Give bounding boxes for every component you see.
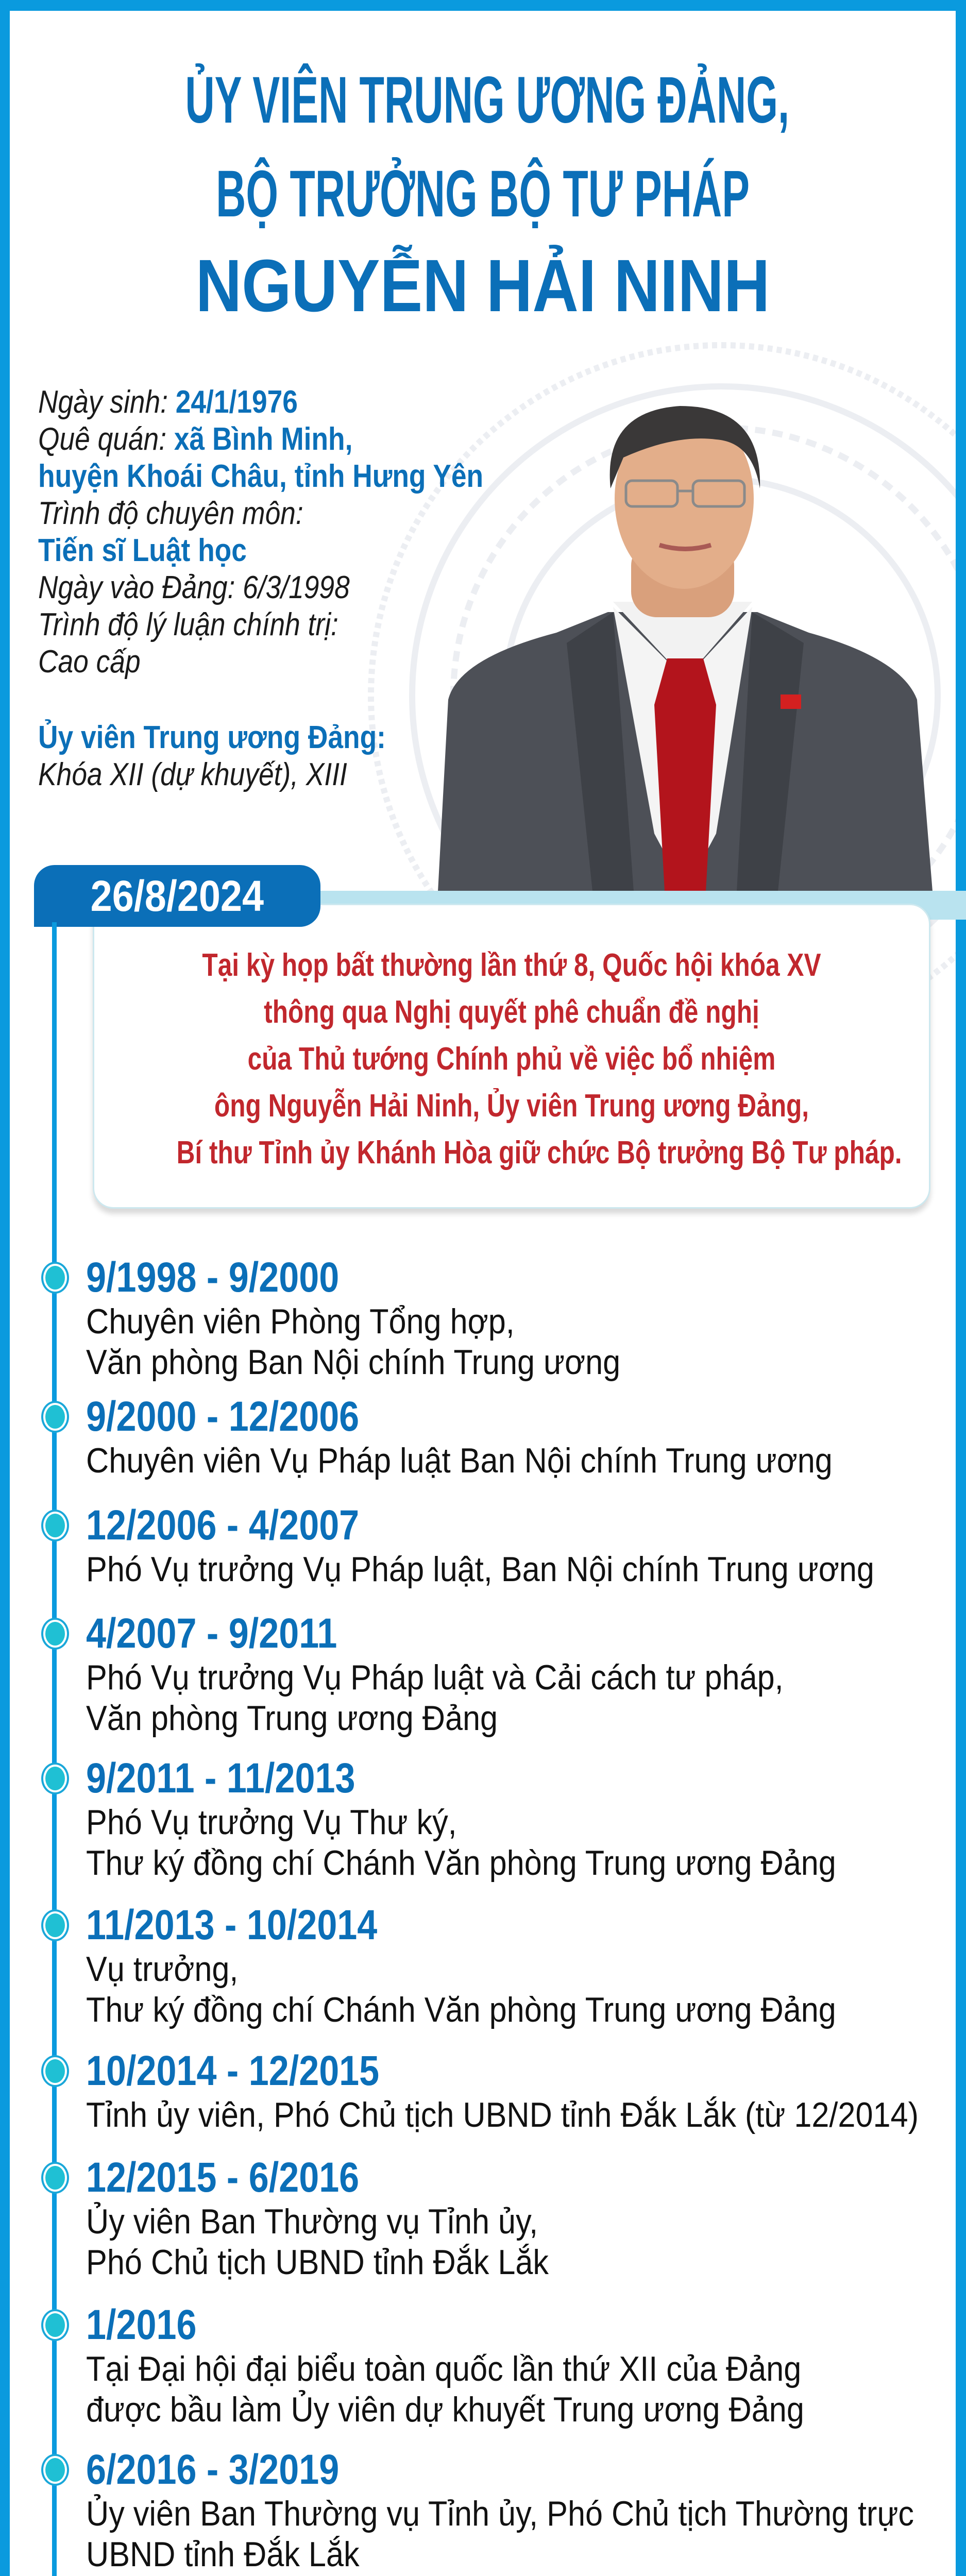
info block: Ủy viên Trung ương Đảng: [38,720,386,755]
text: Phó Vụ trưởng Vụ Pháp luật và Cải cách tư pháp, [86,1658,784,1697]
text: Tại Đại hội đại biểu toàn quốc lần thứ XII của Đảng [86,2349,801,2388]
text: Tỉnh ủy viên, Phó Chủ tịch UBND tỉnh Đắk Lắk (từ 12/2014) [86,2095,919,2134]
text: UBND tỉnh Đắk Lắk [86,2535,360,2574]
text: được bầu làm Ủy viên dự khuyết Trung ương Đảng [86,2390,804,2429]
title [185,63,789,327]
frame border [0,0,966,11]
text: Thư ký đồng chí Chánh Văn phòng Trung ương Đảng [86,1990,836,2029]
info block: huyện Khoái Châu, tỉnh Hưng Yên [38,459,483,494]
title: ỦY VIÊN TRUNG ƯƠNG ĐẢNG, [185,63,789,137]
text: 1/2016 [86,2301,196,2348]
text: 10/2014 - 12/2015 [86,2047,379,2094]
portrait photo [438,406,933,891]
text: 4/2007 - 9/2011 [86,1610,337,1657]
info block [38,384,483,792]
text: Thư ký đồng chí Chánh Văn phòng Trung ương Đảng [86,1843,836,1883]
info block: Ngày sinh: 24/1/1976 [38,384,298,420]
info block: Trình độ chuyên môn: [38,496,303,531]
info block: Cao cấp [38,644,141,680]
text: Phó Vụ trưởng Vụ Pháp luật, Ban Nội chính Trung ương [86,1550,874,1589]
text: Chuyên viên Phòng Tổng hợp, [86,1302,515,1341]
text: Bí thư Tỉnh ủy Khánh Hòa giữ chức Bộ trưởng Bộ Tư pháp. [177,1135,902,1171]
title: BỘ TRƯỞNG BỘ TƯ PHÁP [216,157,750,231]
text: ông Nguyễn Hải Ninh, Ủy viên Trung ương Đảng, [214,1088,809,1124]
info block: Tiến sĩ Luật học [38,533,247,568]
text: Tại kỳ họp bất thường lần thứ 8, Quốc hội khóa XV [202,947,821,983]
info block: Trình độ lý luận chính trị: [38,607,338,642]
title: NGUYỄN HẢI NINH [196,244,770,327]
info block: Quê quán: xã Bình Minh, [38,421,352,457]
text: Chuyên viên Vụ Pháp luật Ban Nội chính Trung ương [86,1441,833,1480]
info block: Ngày vào Đảng: 6/3/1998 [38,570,350,605]
text: 9/2011 - 11/2013 [86,1755,355,1802]
text: Phó Chủ tịch UBND tỉnh Đắk Lắk [86,2243,549,2282]
text: Phó Vụ trưởng Vụ Thư ký, [86,1803,457,1842]
date tab: 26/8/2024 [91,872,264,920]
text: 9/2000 - 12/2006 [86,1393,359,1440]
timeline line [52,922,57,2576]
announcement box [93,904,930,1209]
text: Ủy viên Ban Thường vụ Tỉnh ủy, Phó Chủ tịch Thường trực [86,2494,914,2533]
text: của Thủ tướng Chính phủ về việc bổ nhiệm [248,1041,775,1077]
timeline items [43,1264,67,1292]
background seal pattern [368,342,956,980]
light blue band [268,891,966,920]
info block: Khóa XII (dự khuyết), XIII [38,757,347,792]
text: 9/1998 - 9/2000 [86,1254,339,1301]
text: thông qua Nghị quyết phê chuẩn đề nghị [264,994,759,1030]
text: Văn phòng Trung ương Đảng [86,1699,498,1738]
text: 12/2006 - 4/2007 [86,1502,359,1549]
text: 11/2013 - 10/2014 [86,1902,377,1948]
date tab [34,865,320,927]
text: Văn phòng Ban Nội chính Trung ương [86,1343,620,1382]
text: 12/2015 - 6/2016 [86,2154,359,2201]
text: 6/2016 - 3/2019 [86,2446,339,2493]
text: Ủy viên Ban Thường vụ Tỉnh ủy, [86,2202,538,2241]
text: Vụ trưởng, [86,1950,238,1989]
